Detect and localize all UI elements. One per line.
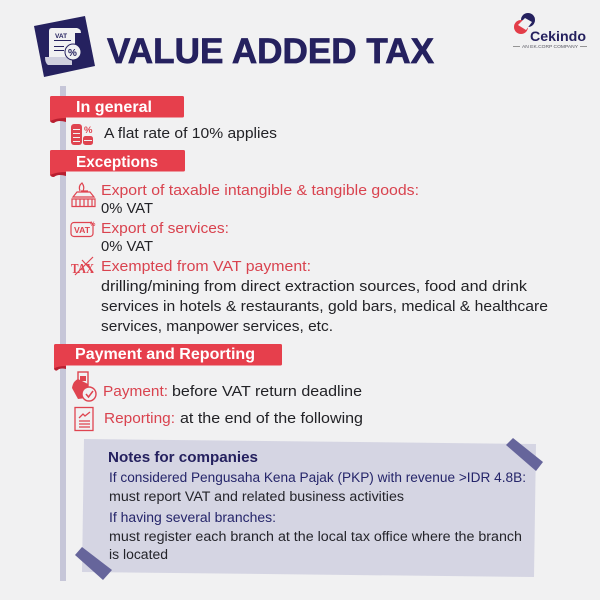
logo: Cekindo: AN EK.CORP COMPANY	[522, 44, 578, 49]
text: export of goods	[101, 183, 419, 217]
icon: VAT tag: VAT	[74, 225, 91, 235]
icon: report chart	[75, 408, 93, 430]
text: payment: before VAT return deadline	[172, 384, 362, 400]
panel: notes for companies	[82, 439, 536, 577]
ribbon: Exceptions: Exceptions	[76, 154, 158, 171]
icon: coins and percent: %	[84, 125, 93, 136]
text: exempted from VAT: services in hotels & restaurants, gold bars, medical & healthcare	[101, 299, 548, 315]
text: branches obligation	[109, 529, 522, 562]
icon: customs building	[72, 183, 95, 206]
icon: VAT tag: %	[90, 222, 96, 228]
text: payment: Payment:	[103, 384, 168, 400]
text: reporting	[104, 411, 363, 427]
text: branches obligation: must register each branch at the local tax office where the branch	[109, 529, 522, 544]
text: PKP condition: If considered Pengusaha Kena Pajak (PKP) with revenue >IDR 4.8B:	[109, 470, 526, 485]
icon: payment check	[72, 372, 96, 401]
icon: VAT document: VAT	[55, 33, 67, 40]
text: branches condition: If having several branches:	[109, 510, 276, 525]
icon: coins and percent	[71, 124, 93, 145]
text: export of services: Export of services:	[101, 221, 229, 237]
text: exempted from VAT: services, manpower services, etc.	[101, 319, 333, 335]
text: export of goods: 0% VAT	[101, 201, 153, 217]
tape: bottom left	[75, 547, 112, 580]
text: export of services: 0% VAT	[101, 239, 153, 255]
ribbon: In general: In general	[76, 99, 152, 116]
text: reporting: Reporting:	[104, 411, 175, 427]
text: exempted from VAT	[101, 259, 548, 335]
text: flat rate: A flat rate of 10% applies	[104, 126, 277, 142]
text: export of services	[101, 221, 229, 255]
icon: crossed TAX: TAX	[71, 262, 94, 277]
text: branches obligation: is located	[109, 547, 168, 562]
tape: top right	[506, 438, 543, 471]
ribbon: Payment and Reporting	[54, 344, 282, 371]
text: exempted from VAT: Exempted from VAT payment:	[101, 259, 311, 275]
icon: VAT document: %	[68, 48, 77, 59]
text: payment	[103, 384, 362, 400]
icon: VAT document	[34, 16, 95, 77]
heading: notes: Notes for companies	[108, 449, 258, 466]
ribbon: In general	[50, 96, 184, 123]
text: reporting: at the end of the following	[180, 411, 363, 427]
icon: crossed TAX	[71, 257, 94, 277]
text: exempted from VAT: drilling/mining from direct extraction sources, food and drink	[101, 279, 528, 295]
text: PKP obligation: must report VAT and related business activities	[109, 489, 404, 504]
text: export of goods: Export of taxable intangible & tangible goods:	[101, 183, 419, 199]
title: VALUE ADDED TAX	[107, 32, 435, 71]
ribbon: Exceptions	[50, 150, 185, 177]
icon: VAT tag	[71, 222, 96, 236]
logo: Cekindo	[513, 13, 587, 49]
logo: Cekindo: Cekindo	[530, 28, 586, 44]
ribbon: Payment and Reporting: Payment and Reporting	[75, 346, 255, 363]
